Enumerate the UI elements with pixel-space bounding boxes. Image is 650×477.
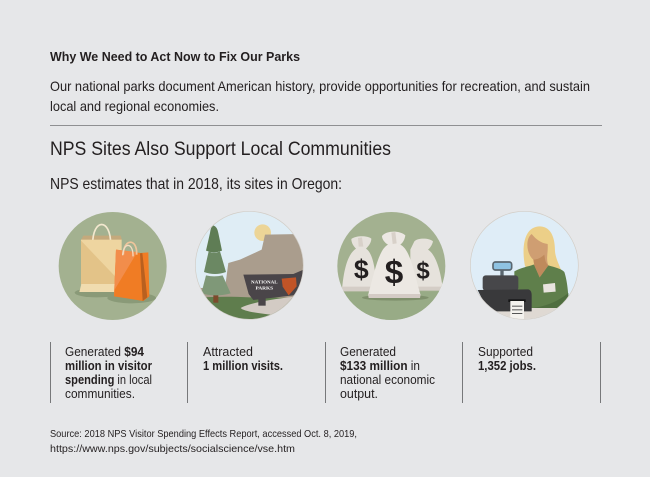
stat: jobs — [478, 344, 536, 373]
icon: money bags — [337, 212, 446, 320]
intro paragraph: Our national parks document American history, provide opportunities for recreation, and sustain — [50, 78, 590, 94]
source note: Source: 2018 NPS Visitor Spending Effects Report, accessed Oct. 8, 2019, — [50, 428, 357, 440]
dollar signs: $ — [385, 254, 404, 291]
stat: visits: Attracted — [203, 344, 253, 359]
stat: visitor spending: spending in local — [65, 372, 152, 387]
infographic — [50, 52, 602, 454]
column dividers — [50, 342, 601, 403]
icon: shopping bags — [59, 212, 167, 320]
sign text — [251, 280, 278, 290]
intro paragraph — [50, 78, 590, 114]
icon: national park sign — [195, 211, 304, 320]
title: Why We Need to Act Now to Fix Our Parks — [50, 50, 300, 64]
stat: jobs: 1,352 jobs. — [478, 358, 536, 373]
stat: visits: 1 million visits. — [203, 358, 283, 373]
dollar signs: $ — [354, 255, 369, 285]
icon: cashier — [470, 211, 579, 320]
stat: visitor spending: Generated $94 — [65, 344, 145, 359]
stat: economic output: $133 million in — [340, 358, 420, 373]
stat: economic output — [340, 344, 435, 401]
stat: economic output: output. — [340, 386, 378, 401]
sign text: NATIONAL — [251, 280, 278, 285]
stat: visitor spending — [65, 344, 152, 401]
section heading: NPS Sites Also Support Local Communities — [50, 138, 391, 160]
source note — [50, 428, 357, 455]
stat: jobs: Supported — [478, 344, 533, 359]
stat: visitor spending: communities. — [65, 386, 135, 401]
stat: economic output: national economic — [340, 372, 435, 387]
intro paragraph: local and regional economies. — [50, 98, 219, 114]
source note: https://www.nps.gov/subjects/socialscience/vse.htm — [50, 443, 295, 455]
dollar signs: $ — [416, 258, 430, 285]
stat: economic output: Generated — [340, 344, 396, 359]
sign text: PARKS — [255, 286, 274, 291]
stat: visits — [203, 344, 283, 373]
dollar signs — [354, 258, 430, 286]
stat: visitor spending: million in visitor — [65, 358, 152, 373]
subheading: NPS estimates that in 2018, its sites in Oregon: — [50, 176, 342, 193]
